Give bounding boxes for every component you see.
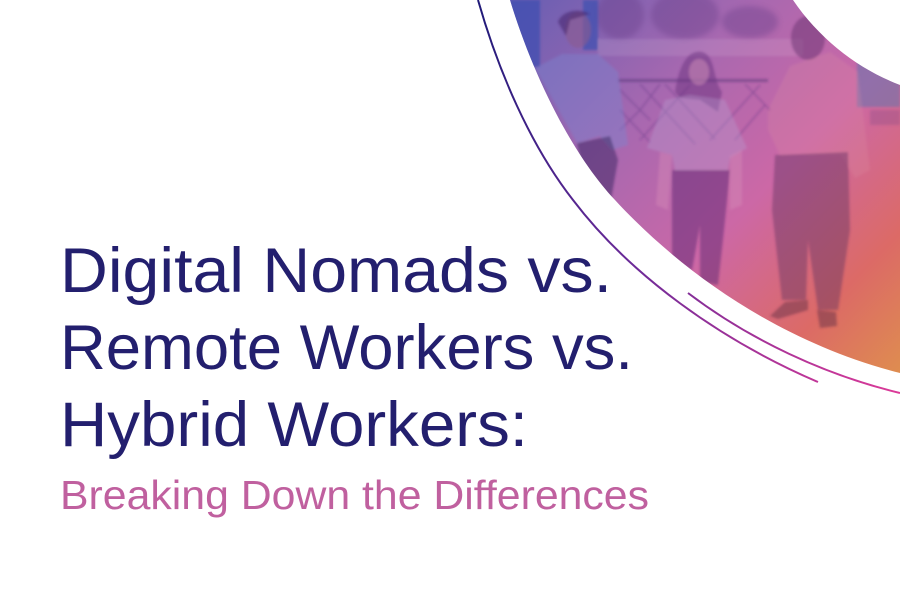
curved line: long outer arc [478,0,818,382]
gradient base [500,0,900,380]
person: woman in centre [647,52,747,285]
person: man on left [535,11,628,205]
title: Hybrid Workers: [60,390,528,460]
title: Digital Nomads vs. [60,236,612,306]
photo backdrop [510,0,900,144]
photo: three colleagues walking under a gradient [500,0,900,380]
person: man on right [768,16,870,328]
foliage behind the group [596,0,778,39]
subtitle: Breaking Down the Differences [60,472,649,518]
curved line: short inner arc [688,293,900,393]
title: Remote Workers vs. [60,313,633,383]
